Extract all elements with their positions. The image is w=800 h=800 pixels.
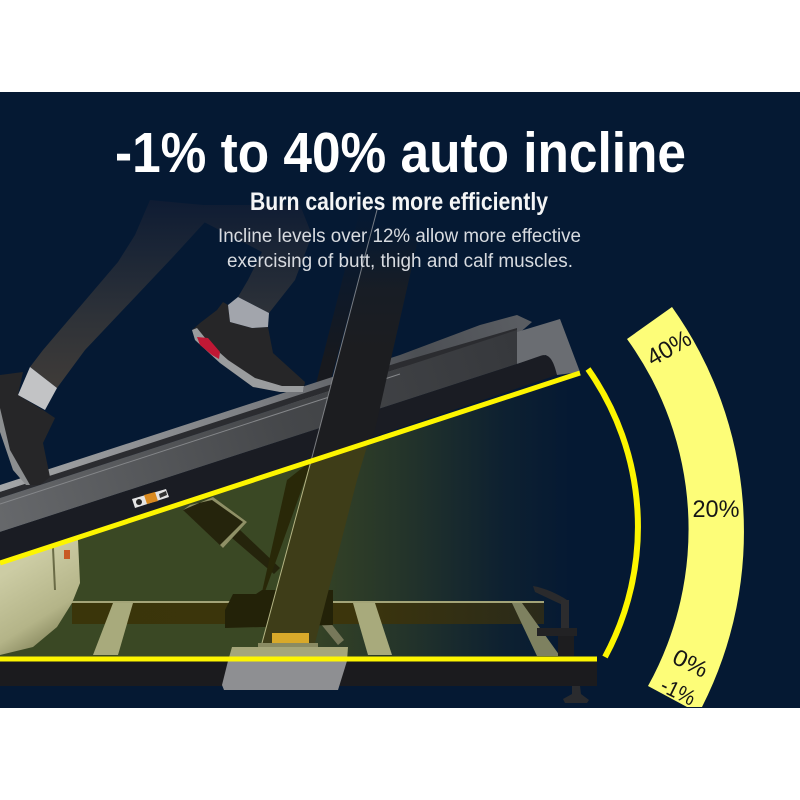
front shoe <box>192 302 305 392</box>
floor plate <box>228 643 348 661</box>
gray foot plate <box>222 661 347 690</box>
front upright column <box>340 210 418 350</box>
cross bar <box>72 603 544 624</box>
title: -1% to 40% auto incline <box>115 121 686 185</box>
treadmill deck <box>0 315 580 563</box>
column edge highlight <box>311 210 377 461</box>
front upright column lower <box>262 443 368 643</box>
base frame <box>72 601 560 656</box>
base beam <box>0 661 597 686</box>
column solid part over deck <box>311 350 393 461</box>
yellow column label <box>272 633 309 643</box>
left strut <box>93 603 133 655</box>
cross bar top edge <box>72 601 544 603</box>
incline scale band <box>627 307 744 711</box>
label 20%: 20% <box>692 496 740 523</box>
yellow arc <box>588 369 638 657</box>
label 0%: 0% <box>669 644 712 683</box>
yellow ground line <box>0 656 597 662</box>
label -1%: -1% <box>657 672 700 711</box>
black lower panel <box>0 355 557 563</box>
label 40%: 40% <box>642 325 696 372</box>
gray side panel <box>0 330 517 532</box>
levelling foot <box>563 686 589 703</box>
silver rail <box>0 315 532 492</box>
middle strut <box>353 603 392 655</box>
warning sticker <box>132 489 169 508</box>
rear upright column <box>316 210 377 384</box>
rear sock <box>18 367 57 410</box>
dark gap under rail <box>0 328 517 498</box>
description: exercising of butt, thigh and calf muscles. <box>227 251 573 272</box>
end cap <box>517 319 580 375</box>
yellow tinted incline area <box>0 369 638 659</box>
motor sticker <box>64 550 70 559</box>
gray panel highlight <box>0 374 400 504</box>
runner legs <box>0 200 312 485</box>
yellow deck line <box>0 373 580 563</box>
pivot bracket <box>225 590 333 628</box>
rear shoe <box>0 372 55 485</box>
description <box>218 226 581 272</box>
rear leg <box>30 200 205 388</box>
actuator <box>183 497 344 645</box>
subtitle: Burn calories more efficiently <box>250 188 548 216</box>
right strut <box>512 603 560 656</box>
front shoe sole <box>192 328 304 392</box>
adjuster knob <box>533 586 577 656</box>
front shoe red heel <box>197 337 220 359</box>
dark navy background <box>0 92 800 708</box>
rear shoe sole <box>0 408 30 485</box>
motor cover <box>0 540 80 655</box>
rear column lower part <box>262 461 311 600</box>
column edge highlight lower <box>262 461 311 643</box>
front sock <box>228 297 269 328</box>
front leg <box>203 205 312 313</box>
description: Incline levels over 12% allow more effective <box>218 226 581 247</box>
